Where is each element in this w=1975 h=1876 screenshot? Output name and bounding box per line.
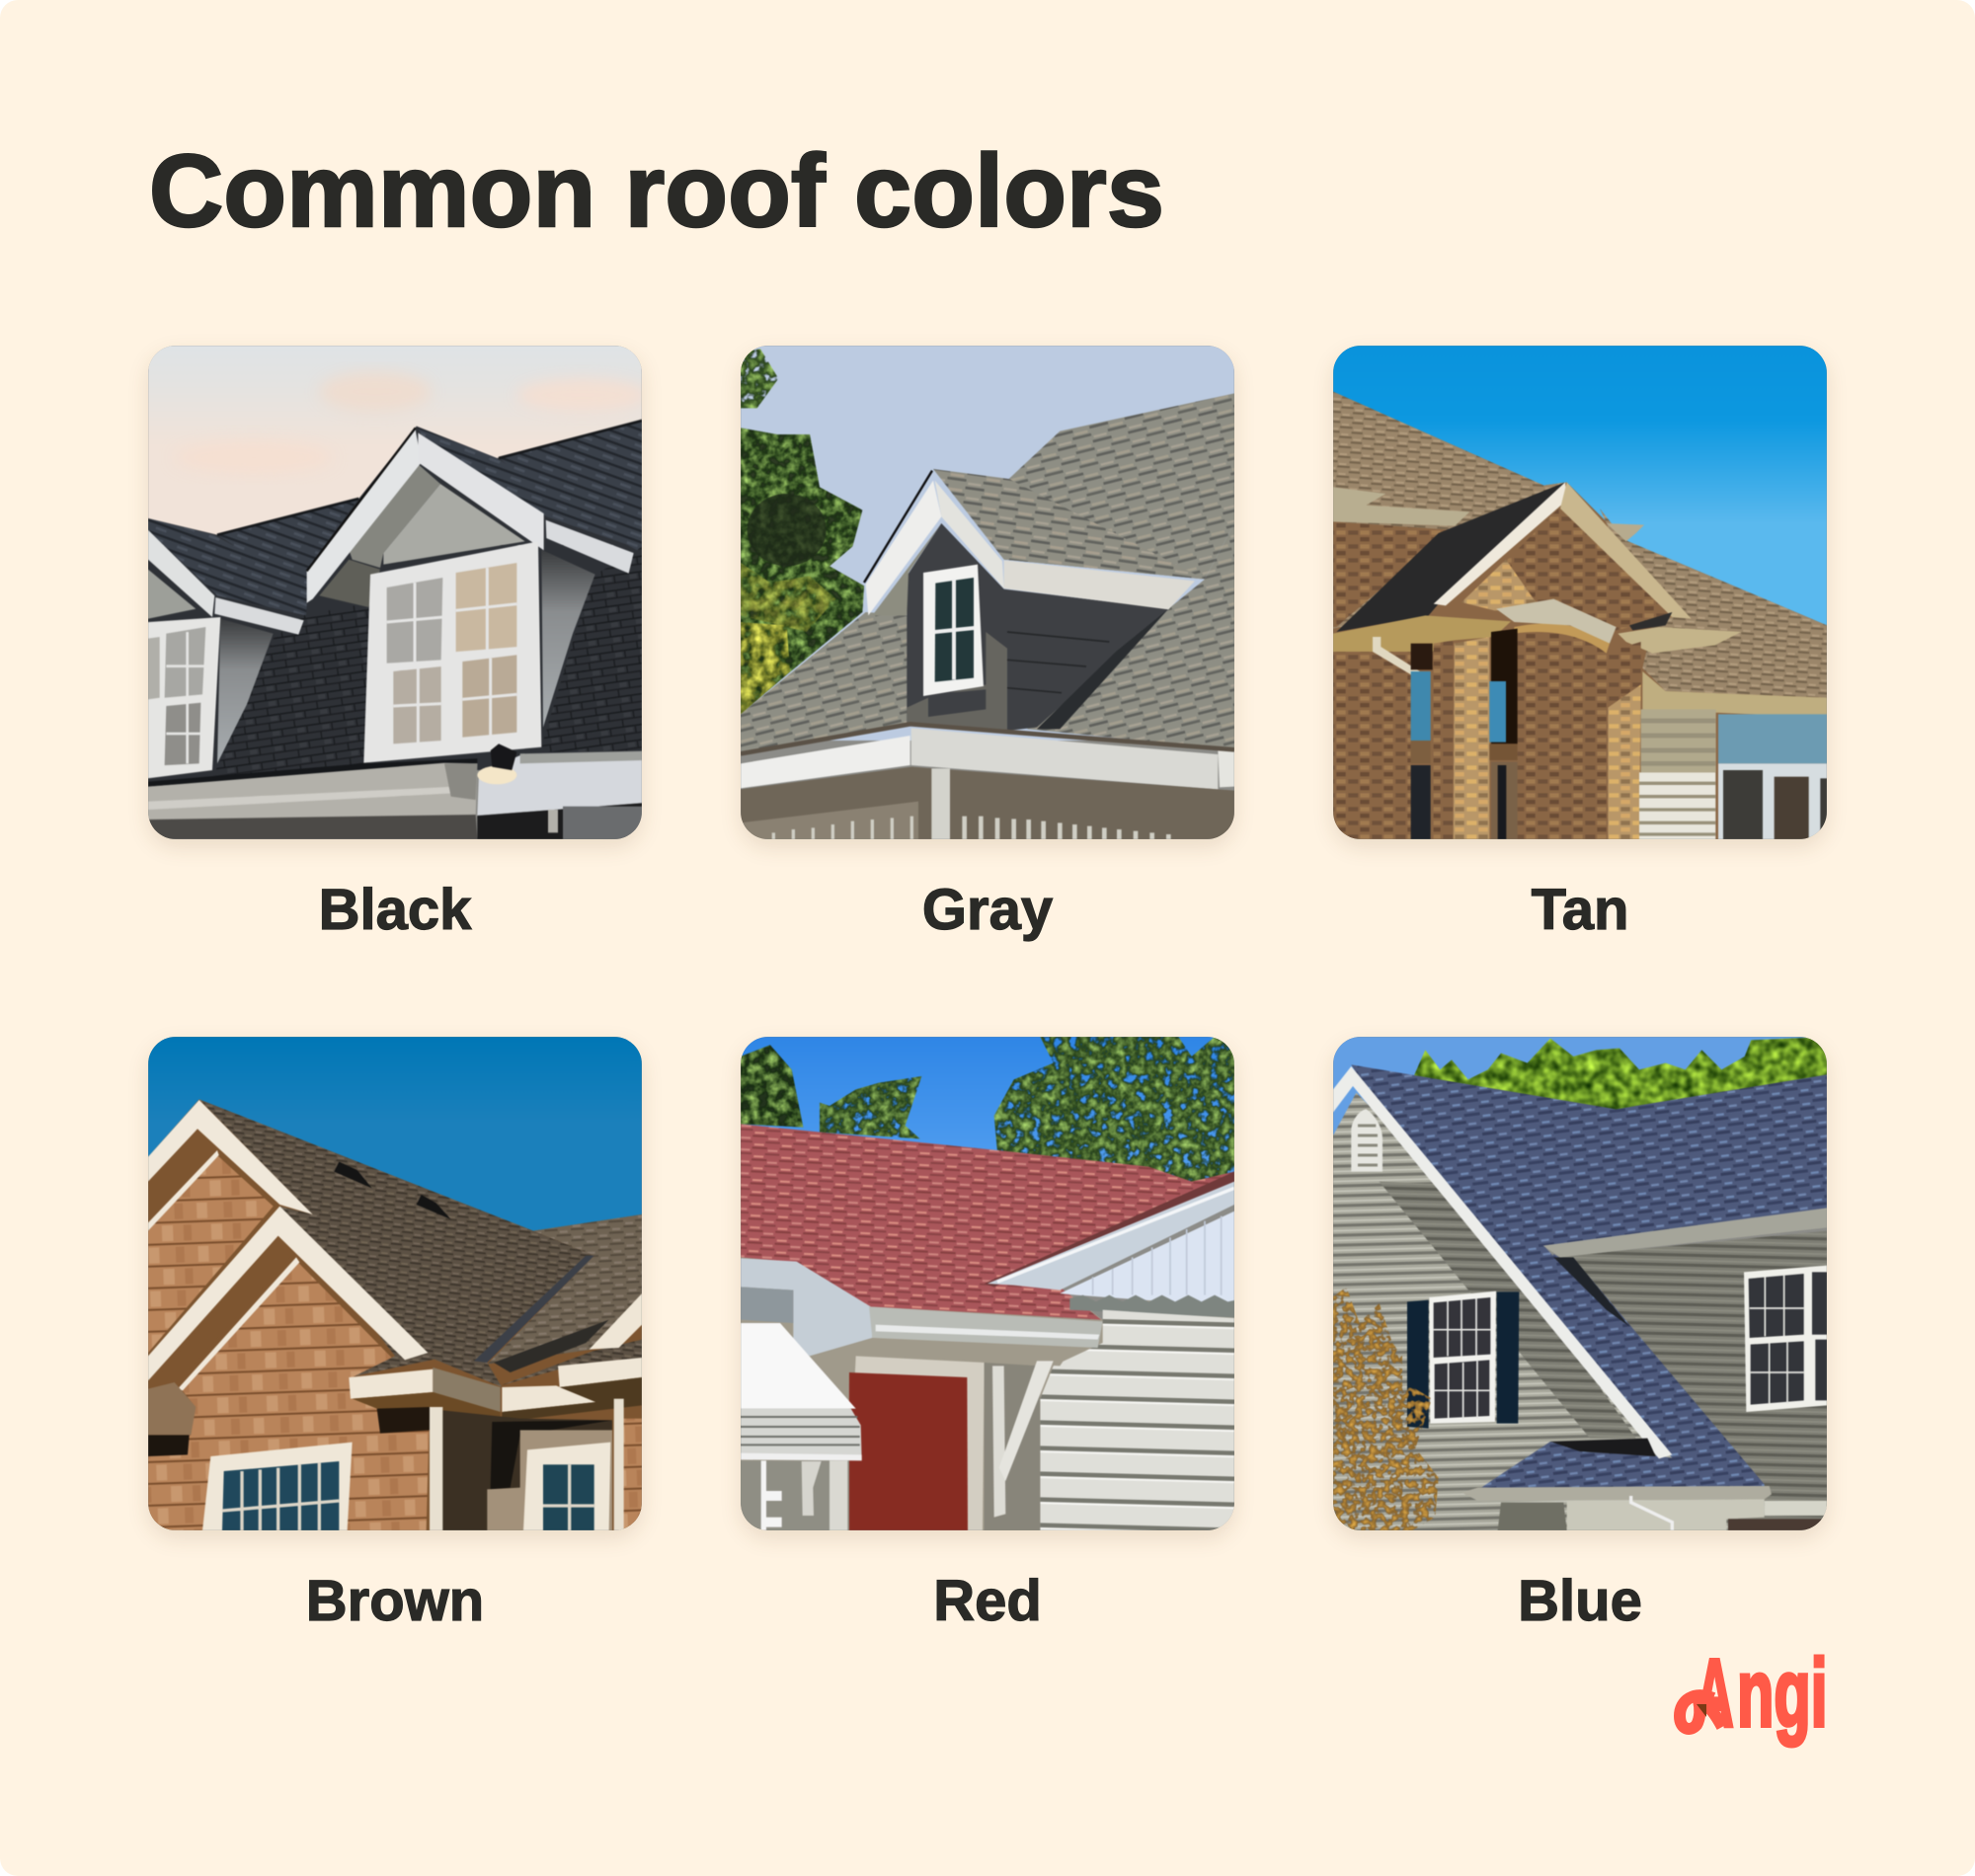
autumn shrub: [1333, 1287, 1439, 1530]
right window: [523, 1443, 610, 1530]
photo: blue roof: [1333, 1037, 1827, 1530]
tan shingle roof: [1333, 392, 1827, 698]
red shingle roof: [741, 1124, 1234, 1320]
dormer wall: [907, 523, 1168, 731]
lower structure base: [741, 1224, 1234, 1530]
red door: [847, 1356, 985, 1530]
logo: Angi: [1674, 1641, 1828, 1748]
security light: [477, 743, 516, 784]
lower gutter and porch: [1462, 1486, 1827, 1530]
white trim: [741, 471, 1234, 789]
label: Blue: Blue: [1518, 1569, 1642, 1633]
eaves: [148, 1293, 642, 1456]
white siding: [1040, 1310, 1234, 1530]
label: Red: Red: [933, 1569, 1042, 1633]
dormer window: [923, 565, 984, 696]
dark roof base: [148, 421, 642, 783]
logo swoosh: [1680, 1695, 1722, 1729]
rear roof: [487, 1214, 642, 1365]
blue sky: [1333, 346, 1827, 642]
tree: [741, 349, 864, 714]
eaves and gutter: [148, 751, 642, 839]
back roof planes: [217, 421, 642, 615]
gutter over door: [810, 1306, 1103, 1366]
center dormer white trim and siding: [307, 428, 634, 728]
photo: gray roof: [741, 346, 1234, 839]
white rake board: [1333, 1066, 1672, 1458]
windows between pillars: [1411, 629, 1518, 839]
center dormer roof: [417, 427, 637, 548]
building base: [1333, 392, 1827, 839]
light blue sky: [1333, 1037, 1827, 1135]
left dormer: [148, 518, 306, 778]
house base: [148, 1099, 642, 1530]
photo: red roof: [741, 1037, 1234, 1530]
white awning: [741, 1323, 862, 1460]
upper left gutters and brick: [1333, 487, 1469, 627]
brown shingle roof: [199, 1099, 642, 1387]
recessed dark siding: [377, 1399, 642, 1530]
left window with shutters: [1407, 1291, 1519, 1429]
front gable brick and trim: [1434, 482, 1692, 630]
roof vents and valley: [334, 1162, 609, 1372]
bracket and wall right of door: [985, 1361, 1054, 1530]
porch gutters: [1333, 615, 1827, 718]
wall below awning: [741, 1460, 849, 1530]
tree line: [1414, 1037, 1827, 1113]
brick walls and pillars: [1333, 627, 1641, 839]
deep blue sky: [148, 1037, 642, 1251]
photo: tan roof: [1333, 346, 1827, 839]
gray siding walls: [1333, 1093, 1827, 1530]
porch below eaves: [741, 767, 1234, 839]
photo: black roof: [148, 346, 642, 839]
main gray shingle planes: [741, 393, 1234, 753]
sky: [741, 346, 1234, 741]
right window: [1744, 1266, 1827, 1412]
gable vent: [1351, 1109, 1382, 1172]
photo: brown roof: [148, 1037, 642, 1530]
white rake and gable: [988, 1182, 1244, 1318]
label: Black: Black: [319, 878, 471, 942]
shadow under dormer eave: [1550, 1439, 1656, 1456]
center dormer window: [363, 541, 541, 763]
upper gutter: [1543, 1208, 1827, 1257]
sky with clouds: [148, 346, 649, 609]
lower gable trim: [148, 1207, 428, 1390]
trees: [741, 1037, 1234, 1182]
siding and right windows: [1639, 709, 1827, 839]
logo swoosh shadow: [1697, 1704, 1706, 1717]
upper gable trim: [148, 1100, 313, 1231]
main dark shingle roof: [212, 546, 642, 778]
logo letter A: A: [1696, 1639, 1734, 1747]
title: Common roof colors: [149, 134, 1164, 249]
blue shingle roof: [1351, 1064, 1827, 1488]
blue sky: [741, 1037, 1234, 1202]
label: Tan: Tan: [1532, 878, 1628, 942]
label: Brown: Brown: [306, 1569, 484, 1633]
label: Gray: Gray: [922, 878, 1053, 942]
cedar shingle walls: [148, 1155, 430, 1530]
left gable return: [741, 1258, 872, 1356]
arch stone and downspout: [1373, 599, 1617, 686]
logo letters ngi: ngi: [1737, 1641, 1828, 1748]
dark roof section: [1336, 482, 1565, 632]
left window: [202, 1443, 353, 1530]
